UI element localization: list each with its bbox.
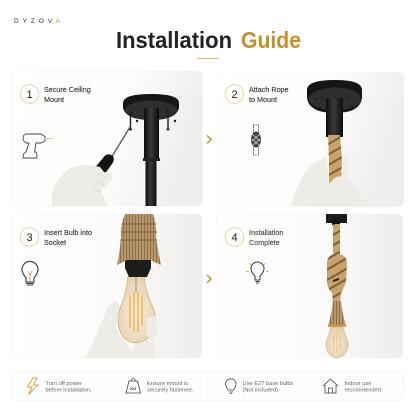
- indoor notice: recommended.: [344, 388, 383, 394]
- icon: knot: [251, 125, 261, 155]
- panel: notices: [12, 372, 403, 401]
- step 3 label: Insert Bulb into: [44, 228, 92, 237]
- step number 2: [225, 85, 244, 103]
- icon: drill: [23, 134, 53, 158]
- panel: step 2: [216, 72, 404, 207]
- power notice: Turn off power: [46, 381, 82, 387]
- arrow 2: [207, 275, 211, 283]
- step 2 label: to Mount: [249, 95, 277, 104]
- step number 1: 1: [26, 89, 33, 101]
- ceiling mount: [307, 80, 362, 137]
- mount notice: securely fastened.: [147, 388, 194, 394]
- step 4 label: Complete: [249, 238, 280, 247]
- icon: lit bulb: [246, 260, 268, 283]
- panel: step 1: [12, 71, 202, 206]
- title: Installation: [116, 27, 232, 53]
- step 1 label: Secure Ceiling: [44, 85, 91, 94]
- hanging rope and knot: [327, 224, 347, 303]
- amber rim: [328, 325, 346, 327]
- title: [116, 27, 301, 53]
- ceiling mount: [123, 94, 179, 206]
- step number 1: [20, 85, 39, 103]
- gloved hand: [51, 165, 112, 206]
- step number 4: [225, 228, 244, 246]
- title underline: [197, 58, 219, 59]
- gloved hands: [291, 157, 368, 206]
- step number 3: [20, 228, 39, 246]
- step 3 label: Socket: [44, 238, 66, 247]
- title: Guide: [241, 27, 301, 53]
- step number 3: 3: [26, 232, 33, 244]
- icon: bulb outline: [226, 379, 236, 394]
- icon: lightning: [28, 378, 38, 394]
- logo: DYZOVA: [14, 18, 64, 25]
- socket mount: [326, 214, 347, 223]
- icon: weight: KG: [130, 386, 136, 391]
- icon: bulb: [22, 262, 38, 285]
- step 1 label: Mount: [44, 95, 64, 104]
- bulb: [118, 272, 156, 343]
- arrow 1: [207, 136, 211, 144]
- panel: step 4: [216, 214, 403, 358]
- rope cap: [117, 214, 161, 265]
- screwdriver: [86, 127, 130, 186]
- panel: step 3: [12, 214, 202, 358]
- step number 2: 2: [231, 89, 238, 101]
- icon: house: [323, 379, 338, 393]
- step 2 label: Attach Rope: [249, 85, 289, 94]
- step 4 label: Installation: [249, 228, 283, 237]
- bulb notice: Use E27 base bulbs: [242, 381, 294, 387]
- mount notice: Ensure mount is: [147, 381, 188, 387]
- icon: weight: [126, 378, 140, 393]
- indoor notice: Indoor use: [344, 381, 371, 387]
- socket: [125, 256, 151, 277]
- bulb: [326, 327, 348, 358]
- gloved hand: [85, 300, 157, 358]
- step number 4: 4: [231, 232, 238, 244]
- bulb notice: (Not included).: [242, 388, 280, 394]
- rope cap: [328, 301, 346, 326]
- rope: [328, 135, 342, 190]
- power notice: before installation.: [46, 388, 92, 394]
